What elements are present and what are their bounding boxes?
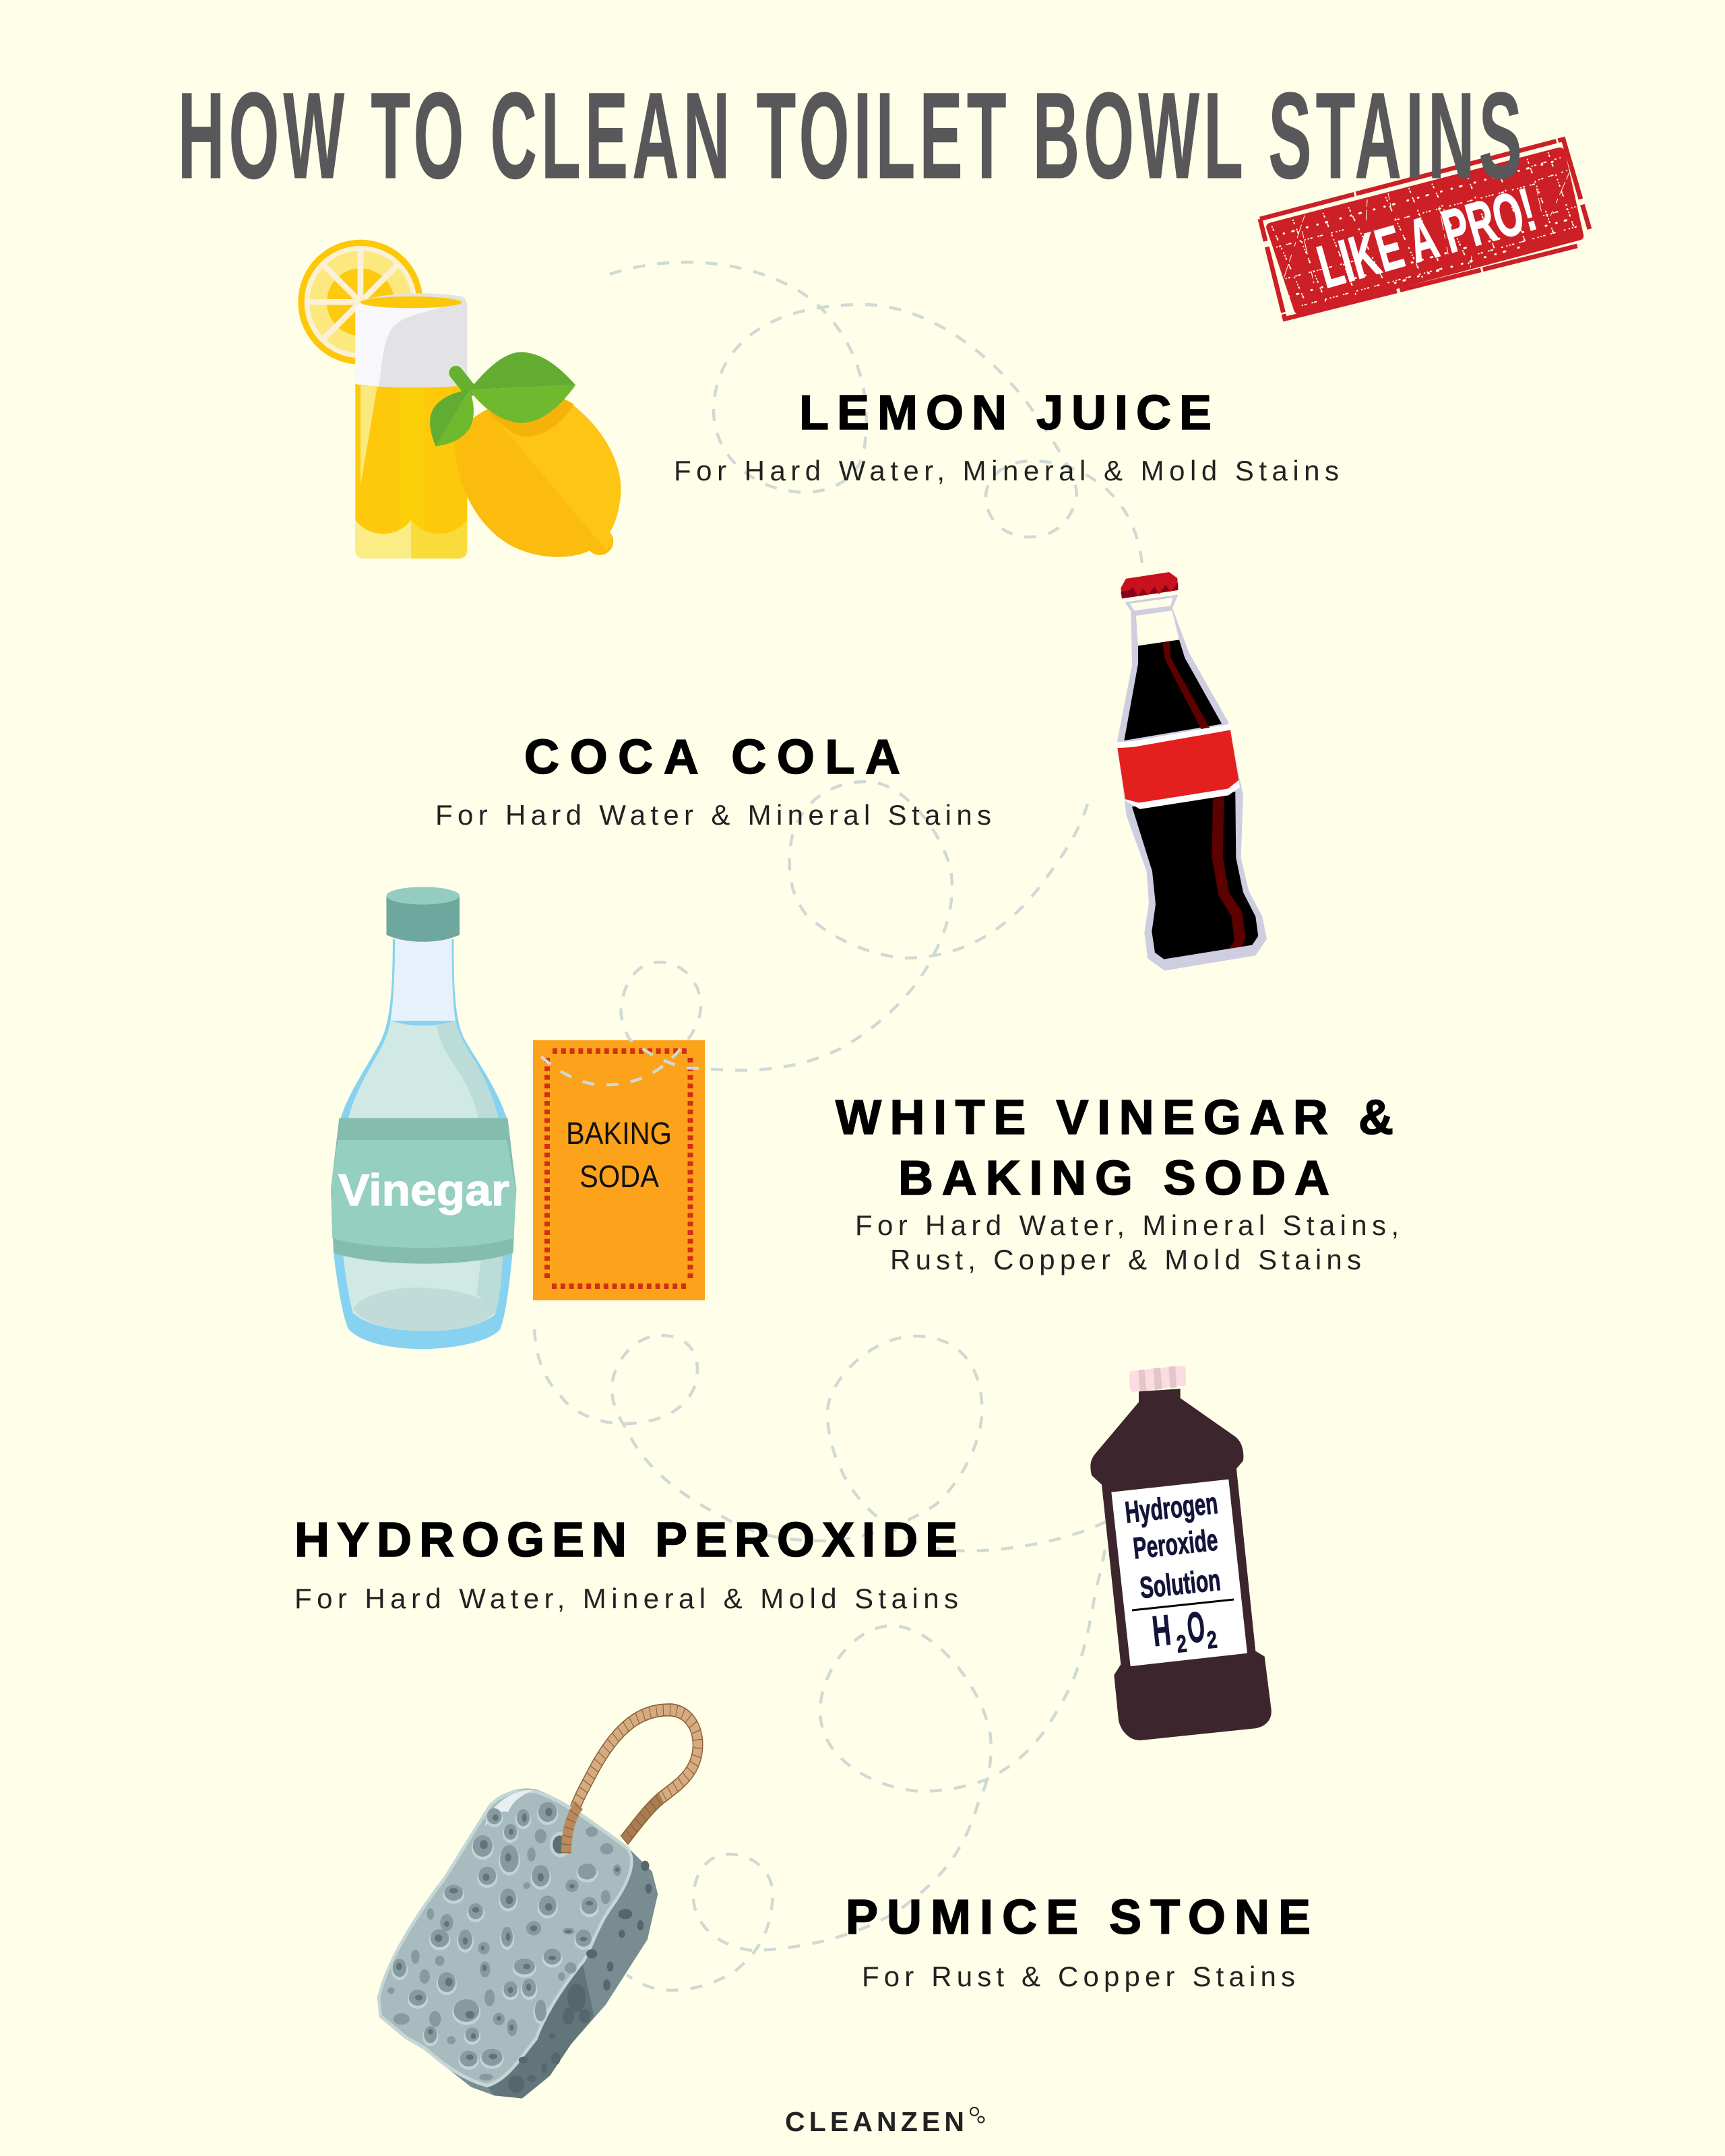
icon: hydrogen peroxide bottle: Hydrogen — [1123, 1486, 1220, 1529]
icon: cola bottle — [1117, 572, 1267, 971]
block: white vinegar and baking soda text — [836, 1091, 1399, 1275]
glass — [355, 293, 467, 559]
stamp: like a pro: LIKE A PRO! — [1311, 176, 1543, 301]
logo: cleanzen: CLEANZEN — [785, 2106, 964, 2137]
block: hydrogen peroxide text — [294, 1513, 958, 1614]
rope hole — [550, 1805, 579, 1858]
block: lemon juice text — [674, 386, 1339, 486]
block: lemon juice text: LEMON JUICE — [799, 386, 1212, 440]
stone pores — [391, 1803, 599, 2070]
block: pumice stone text: PUMICE STONE — [846, 1891, 1311, 1944]
block: coca cola text — [435, 730, 991, 831]
stone body side — [377, 1789, 658, 2098]
lemon slice — [298, 240, 423, 364]
leaves — [430, 352, 575, 447]
block: coca cola text: For Hard Water & Mineral Stains — [435, 799, 991, 831]
icon: hydrogen peroxide bottle: 2 — [1175, 1629, 1188, 1658]
block: white vinegar and baking soda text: WHITE VINEGAR & — [836, 1091, 1393, 1145]
lemon — [455, 395, 621, 557]
icon: hydrogen peroxide bottle: O — [1185, 1602, 1207, 1652]
icon: hydrogen peroxide bottle: H — [1150, 1606, 1173, 1655]
icon: lemon juice glass and lemon — [298, 240, 621, 559]
icon: baking soda packet: SODA — [579, 1159, 659, 1194]
block: white vinegar and baking soda text: BAKING SODA — [898, 1151, 1329, 1205]
block: pumice stone text — [846, 1891, 1311, 1992]
stamp wear marks — [1272, 153, 1576, 305]
icon: vinegar bottle: Vinegar — [338, 1165, 509, 1215]
icon: pumice stone with rope — [377, 1710, 698, 2098]
rope — [566, 1710, 698, 1851]
block: white vinegar and baking soda text: Rust, Copper & Mold Stains — [890, 1244, 1361, 1275]
stone top face — [379, 1791, 631, 2086]
side pores — [508, 1861, 652, 2093]
icon: vinegar bottle — [331, 887, 517, 1349]
block: coca cola text: COCA COLA — [524, 730, 900, 784]
icon: hydrogen peroxide bottle: Peroxide — [1131, 1523, 1220, 1566]
block: hydrogen peroxide text: HYDROGEN PEROXIDE — [294, 1513, 958, 1567]
icon: hydrogen peroxide bottle — [1090, 1366, 1272, 1740]
stamp: like a pro — [1260, 139, 1590, 319]
icon: baking soda packet: BAKING — [566, 1116, 672, 1151]
block: white vinegar and baking soda text: For Hard Water, Mineral Stains, — [855, 1209, 1399, 1241]
icon: baking soda packet — [533, 1040, 705, 1300]
block: hydrogen peroxide text: For Hard Water, Mineral & Mold Stains — [294, 1583, 958, 1614]
icon: hydrogen peroxide bottle: 2 — [1205, 1625, 1218, 1654]
dashed connector paths — [534, 262, 1143, 1990]
block: pumice stone text: For Rust & Copper Stains — [862, 1961, 1295, 1992]
icon: hydrogen peroxide bottle: Solution — [1138, 1562, 1222, 1605]
block: lemon juice text: For Hard Water, Mineral & Mold Stains — [674, 455, 1339, 486]
